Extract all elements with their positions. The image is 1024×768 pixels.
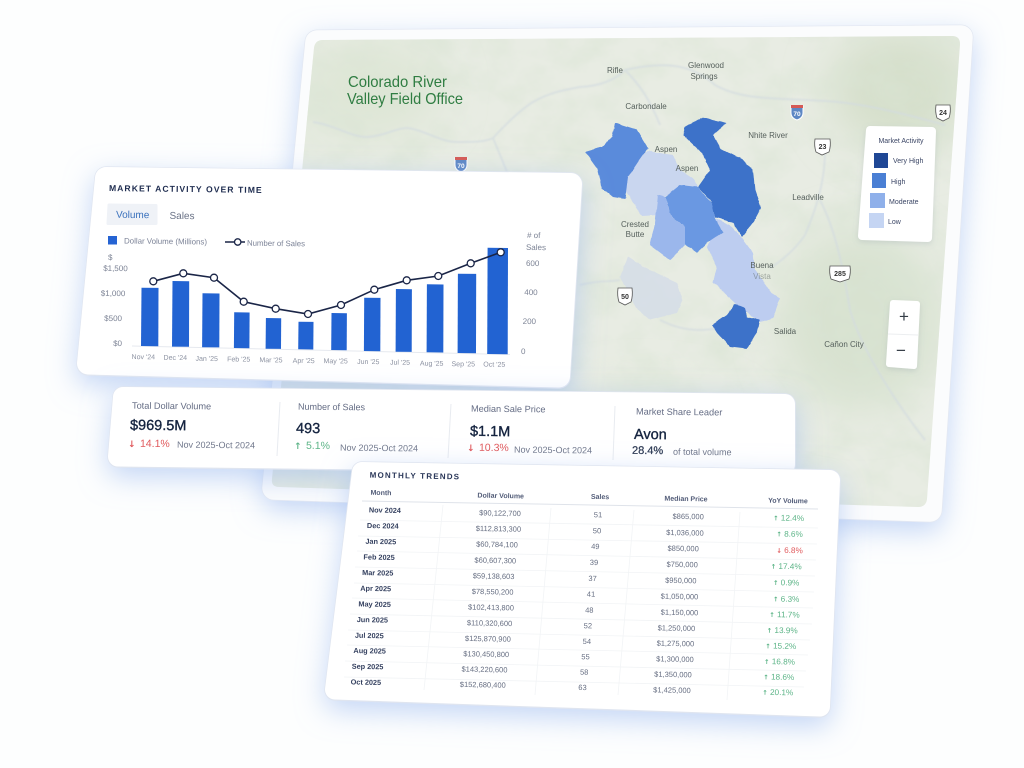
row: Nov 2024: $865,000 [672,512,704,521]
row: Mar 2025 [362,568,799,588]
row: Feb 2025: ↑ 17.4% [771,562,802,571]
row: May 2025: May 2025 [358,599,391,609]
row: Apr 2025: ↑ 6.3% [773,594,799,604]
chart card [88,178,571,377]
right axis: 200 [523,317,537,326]
row: Feb 2025: Feb 2025 [363,552,395,562]
panel: map tablet [260,30,970,520]
KPI: median sale price [467,404,592,455]
legend: market activity: Very High [893,158,923,165]
row: Jan 2025: $850,000 [667,544,699,553]
tabs: Sales [169,211,195,222]
map title: Colorado River [348,74,448,91]
row: Dec 2024: $112,813,300 [476,524,521,534]
map terrain [260,30,970,520]
KPI: total dollar volume: Nov 2025-Oct 2024 [177,440,255,450]
left axis: $500 [104,314,123,323]
legend: market activity: Moderate [889,199,919,206]
table header row [370,490,808,505]
row: Mar 2025: ↑ 0.9% [773,578,799,588]
place labels [607,61,864,349]
row: Oct 2025: $1,425,000 [653,685,691,695]
month labels: Aug '25 [420,361,444,368]
KPI: number of sales [294,402,418,453]
row: Jun 2025: ↑ 13.9% [767,626,798,635]
legend: market activity: High [891,179,906,186]
KPI: number of sales: Nov 2025-Oct 2024 [340,443,418,453]
row: Feb 2025: $750,000 [666,560,698,569]
row: Jul 2025: $1,275,000 [657,639,694,648]
map title: Valley Field Office [347,91,463,108]
row: May 2025 [358,599,800,620]
row: Dec 2024 [367,521,803,539]
table header row: Dollar Volume [477,493,524,500]
month labels: Jan '25 [195,356,218,363]
KPI: median sale price: Median Sale Price [471,404,546,414]
place labels: Leadville [792,193,824,202]
KPI: market share leader: of total volume [673,447,732,457]
row: Sep 2025: $1,350,000 [654,670,692,679]
month labels: May '25 [324,358,348,365]
row: Jun 2025: $110,320,600 [467,618,512,628]
choropleth regions [585,117,780,349]
icon: interstate 70 shield east [791,105,803,120]
tablet frame [274,37,961,510]
row: Sep 2025 [352,662,794,682]
KPI: number of sales: ↑ [294,442,302,452]
month labels: Feb '25 [227,356,250,364]
icon: route 50 shield [618,288,632,305]
place labels: Springs [690,72,718,81]
right axis [521,231,546,356]
month labels: Jul '25 [390,360,410,367]
row: Jun 2025 [357,615,798,635]
row: Mar 2025: 37 [588,574,597,583]
right axis: # of [527,231,541,240]
KPI: median sale price: ↓ [467,444,475,454]
row: Oct 2025: $152,680,400 [460,680,506,690]
icon: interstate 70 shield west: 70 [457,163,465,170]
row: Feb 2025: 39 [590,558,598,567]
zoom controls: − [896,341,906,360]
row: Dec 2024: Dec 2024 [367,521,400,531]
left axis: $ [108,253,113,262]
chart legend [108,236,305,248]
row: May 2025: ↑ 11.7% [769,610,800,620]
map title [347,74,463,108]
table header row: Month [370,490,392,497]
place labels: Cañon City [824,340,864,349]
row: Aug 2025: $130,450,800 [463,649,509,659]
place labels: Rifle [607,66,624,75]
row: Apr 2025: $78,550,200 [472,587,514,597]
row: May 2025: 48 [585,606,594,615]
place labels: Buena [750,261,774,270]
row: Oct 2025: ↑ 20.1% [762,688,793,697]
row: Jan 2025: ↓ 6.8% [776,546,803,555]
row: Jan 2025: Jan 2025 [365,537,396,546]
row: Apr 2025 [360,584,799,604]
tabs [108,205,195,224]
place labels: Aspen [676,164,698,173]
month labels: Dec '24 [164,355,187,362]
month labels: Nov '24 [132,354,155,361]
row: Aug 2025 [353,646,795,667]
row: Mar 2025: Mar 2025 [362,568,394,578]
right axis: 600 [526,259,540,268]
place labels: Glenwood [688,61,724,70]
icon: route 285 shield: 285 [834,271,846,278]
icon: interstate 70 shield east: 70 [793,111,801,118]
chart legend: Number of Sales [247,239,305,248]
row: Aug 2025: 55 [581,652,590,661]
table header row: YoY Volume [768,498,808,505]
KPI: median sale price: Nov 2025-Oct 2024 [514,445,592,455]
left axis: $1,000 [101,289,126,298]
row: Dec 2024: 50 [593,526,601,535]
legend: market activity: Low [888,219,902,226]
panel: monthly trends table [335,471,830,707]
right axis: Sales [526,243,546,252]
row: Oct 2025: Oct 2025 [351,677,381,687]
row: Jul 2025: ↑ 15.2% [765,641,796,651]
KPI: median sale price: $1.1M [470,424,510,440]
row: Jun 2025: 52 [584,621,592,630]
place labels: Salida [774,327,797,336]
KPI: market share leader: Market Share Leader [636,407,722,417]
KPI: total dollar volume [128,401,255,450]
row: Jul 2025 [355,631,796,651]
icon: route 24 shield [936,105,950,121]
row: Aug 2025: $1,300,000 [656,654,694,664]
row: Apr 2025: 41 [587,590,595,599]
table header row: Median Price [664,496,708,503]
row: Nov 2024 [369,505,804,523]
row: May 2025: $102,413,800 [468,603,514,612]
KPI: market share leader: Avon [634,427,667,443]
row: Jan 2025 [365,537,803,555]
icon: route 50 shield: 50 [621,294,629,301]
row: Sep 2025: $143,220,600 [461,665,508,674]
month labels [132,354,505,369]
chart heading: MARKET ACTIVITY OVER TIME [109,183,263,195]
table heading: MONTHLY TRENDS [370,471,460,481]
row: Jan 2025: $60,784,100 [476,540,518,549]
row: Jul 2025: 54 [583,637,591,646]
table header row: Sales [591,494,609,501]
month labels: Apr '25 [293,358,315,365]
KPI: total dollar volume: 14.1% [140,438,170,450]
left axis: $1,500 [103,264,128,273]
place labels: Carbondale [625,102,667,111]
month labels: Jun '25 [357,359,380,366]
row: May 2025: $1,150,000 [661,608,698,617]
row: Nov 2024: 51 [594,510,602,519]
chart legend: Dollar Volume (Millions) [124,236,207,247]
legend: market activity [862,130,932,238]
tabs: Volume [116,210,150,221]
row: Nov 2024: Nov 2024 [369,505,402,515]
KPI card [118,397,785,465]
panel: market activity over time [88,178,571,377]
KPI: market share leader: 28.4% [632,445,663,457]
KPI: number of sales: Number of Sales [298,402,365,412]
place labels: Crested [621,220,649,229]
bar chart: dollar volume [141,248,508,354]
right axis: 400 [524,288,538,297]
zoom controls: + [899,307,909,326]
KPI: number of sales: 493 [296,421,320,437]
KPI: market share leader [632,407,732,457]
row: Feb 2025 [363,552,802,571]
month labels: Sep '25 [451,361,475,368]
row: Apr 2025: Apr 2025 [360,584,391,593]
row: Oct 2025 [351,677,793,697]
icon: route 24 shield: 24 [939,110,947,117]
row: Dec 2024: $1,036,000 [666,528,704,538]
row: Sep 2025: Sep 2025 [352,662,384,671]
place labels: Nhite River [748,131,788,140]
icon: route 23 shield: 23 [819,144,826,151]
right axis: 0 [521,347,526,356]
row: Apr 2025: $1,050,000 [661,592,698,601]
row: Jan 2025: 49 [591,542,600,551]
left axis [101,253,128,348]
KPI: total dollar volume: $969.5M [130,418,187,434]
icon: route 23 shield [815,139,830,155]
legend: market activity: Market Activity [878,138,924,145]
KPI: total dollar volume: Total Dollar Volume [132,401,211,411]
line chart: number of sales [150,249,504,318]
row: Jun 2025: Jun 2025 [357,615,388,625]
row: Nov 2024: ↑ 12.4% [773,513,804,523]
row: Aug 2025: Aug 2025 [353,646,386,656]
panel: KPI summary [118,397,785,465]
icon: route 285 shield [830,266,850,282]
KPI: median sale price: 10.3% [479,442,509,454]
KPI: number of sales: 5.1% [306,440,330,452]
place labels: Aspen [655,145,677,154]
month labels: Oct '25 [483,362,505,369]
row: Jul 2025: $125,870,900 [465,634,511,644]
row: Mar 2025: $950,000 [665,576,697,585]
KPI: total dollar volume: ↓ [128,440,136,450]
place labels: Vista [753,272,771,281]
row: Nov 2024: $90,122,700 [479,508,521,518]
row: Oct 2025: 63 [578,683,587,692]
row: Sep 2025: 58 [580,668,588,677]
row: Jul 2025: Jul 2025 [355,631,384,640]
zoom controls [888,303,918,366]
row: Sep 2025: ↑ 18.6% [763,672,794,682]
table card [335,472,830,707]
place labels: Butte [626,230,645,239]
row: Aug 2025: ↑ 16.8% [764,657,795,667]
row: Dec 2024: ↑ 8.6% [776,529,803,539]
row: Mar 2025: $59,138,603 [473,571,515,581]
row: Feb 2025: $60,607,300 [474,556,516,565]
month labels: Mar '25 [259,357,283,364]
row: Jun 2025: $1,250,000 [658,623,695,633]
left axis: $0 [113,339,123,348]
icon: interstate 70 shield west [455,157,467,172]
